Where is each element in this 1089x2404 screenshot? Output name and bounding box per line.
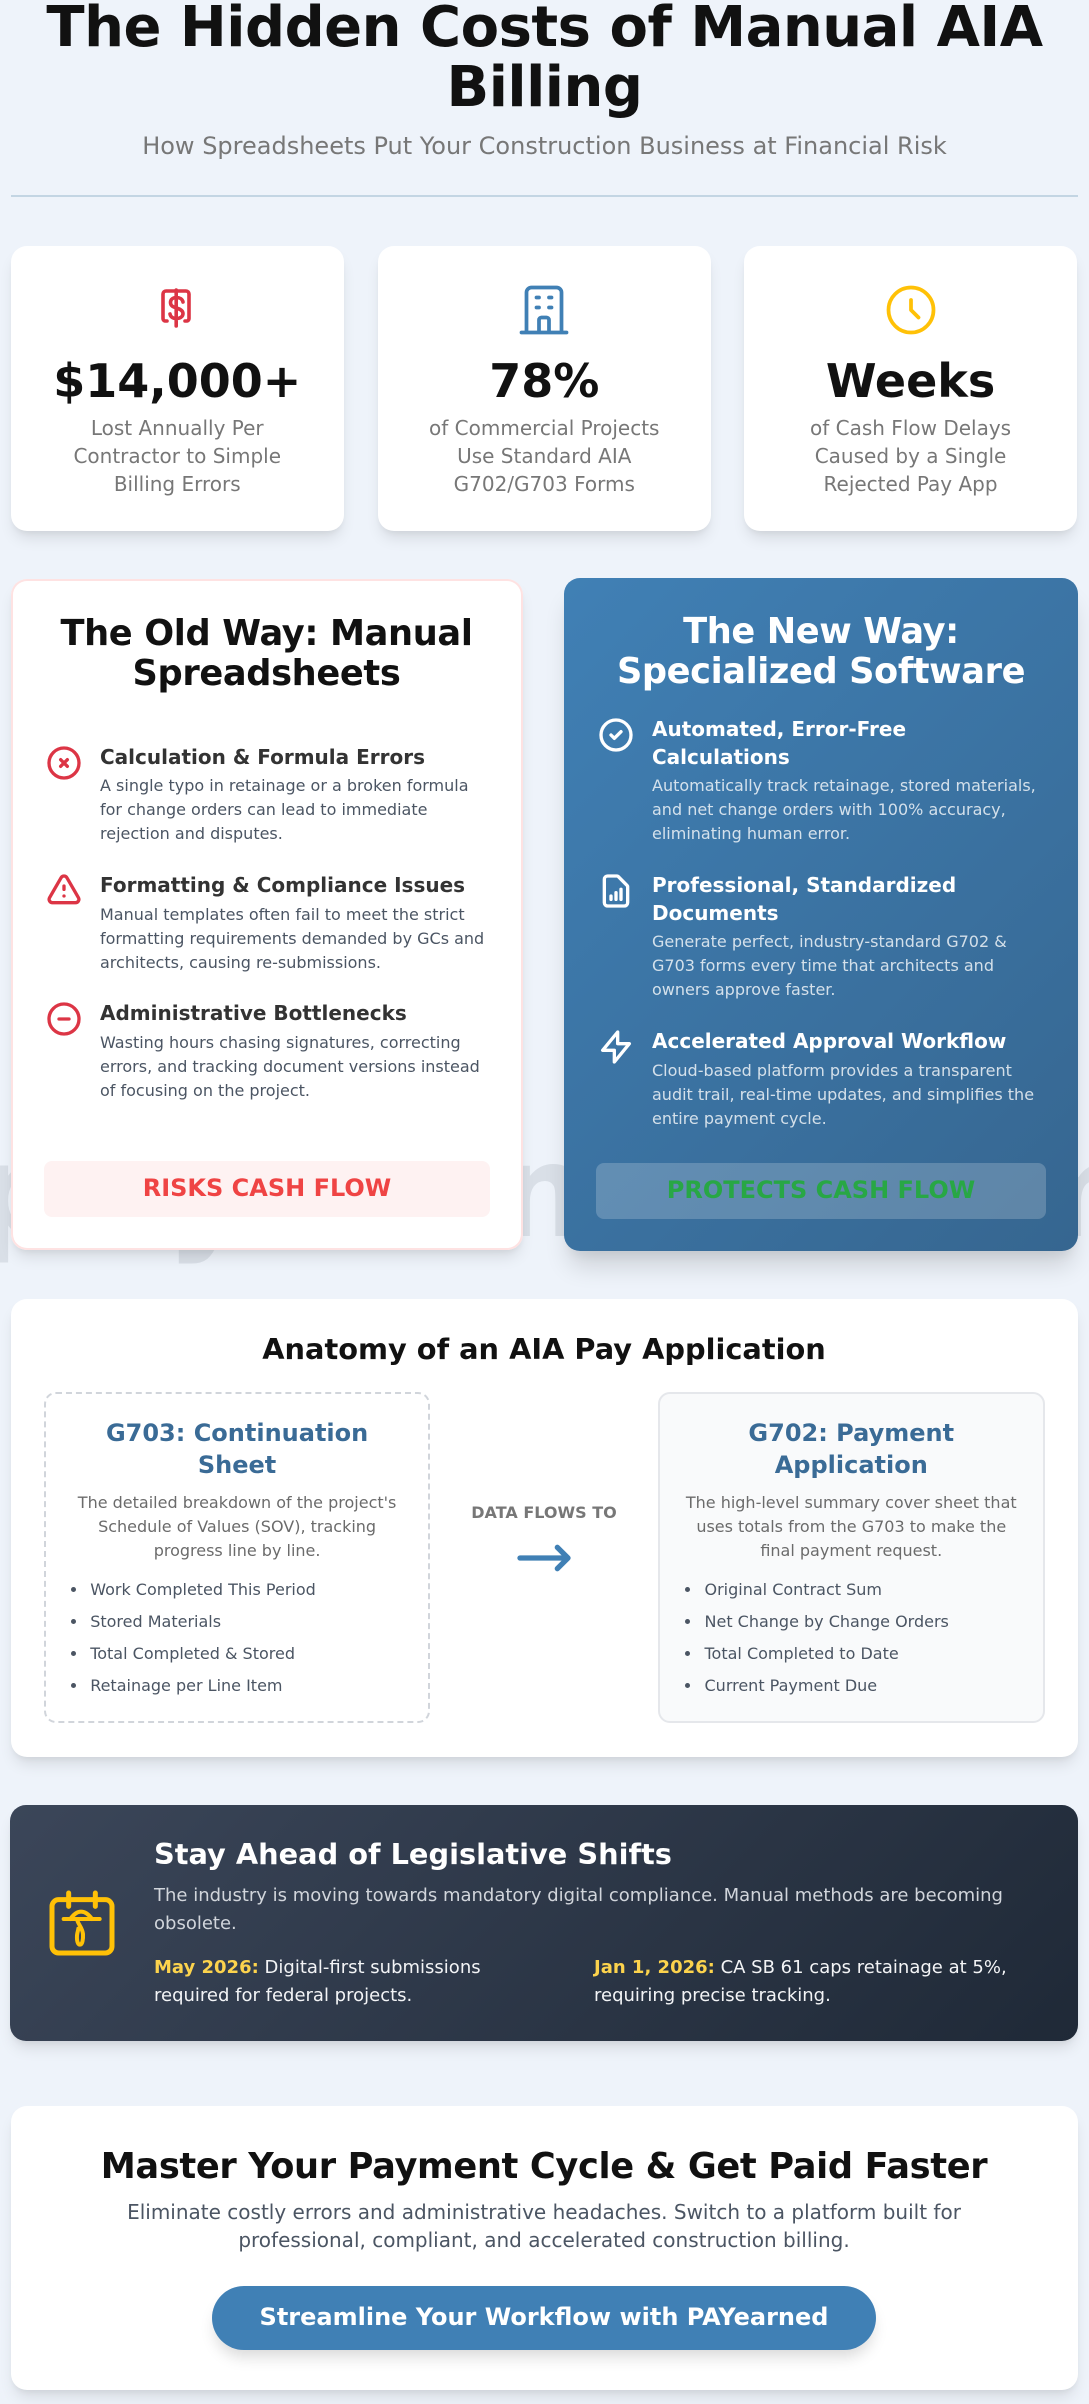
field list: Current Payment Due: [704, 1676, 877, 1695]
stat card: delays: [744, 246, 1077, 531]
paragraph: The industry is moving towards mandatory digital compliance. Manual methods are becoming: [154, 1885, 1003, 1906]
field list: Original Contract Sum: [704, 1580, 882, 1599]
item text: [652, 932, 1007, 999]
heading: [60, 612, 473, 694]
field list: Retainage per Line Item: [90, 1676, 282, 1695]
title: [46, 0, 1043, 120]
item text: for change orders can lead to immediate: [100, 800, 427, 819]
item text: [100, 776, 469, 843]
paragraph: obsolete.: [154, 1913, 237, 1934]
paragraph: Eliminate costly errors and administrative headaches. Switch to a platform built for: [127, 2200, 961, 2224]
field list: [685, 1580, 949, 1695]
item heading: Calculations: [652, 745, 790, 769]
item text: [100, 1032, 480, 1100]
icon: warning triangle: [47, 874, 81, 904]
icon: lightning bolt: [600, 1030, 632, 1064]
card heading: Sheet: [198, 1451, 276, 1479]
item text: Cloud-based platform provides a transparent: [652, 1060, 1012, 1080]
deadline: Jan 2026: [594, 1954, 1007, 2010]
card description: final payment request.: [760, 1541, 942, 1560]
panel: call to action: [10, 2106, 1078, 2390]
stat description: Use Standard AIA: [457, 444, 631, 468]
data flow arrow: [471, 1503, 617, 1572]
field list: Work Completed This Period: [90, 1580, 316, 1599]
item: formatting issues: [47, 873, 484, 972]
heading: Specialized Software: [617, 650, 1025, 692]
button: [212, 2286, 876, 2350]
stat card: annual loss: [10, 246, 344, 531]
item text: Generate perfect, industry-standard G702 &: [652, 932, 1007, 951]
button: Streamline Your Workflow with PAYearned: [260, 2303, 828, 2331]
item text: eliminating human error.: [652, 824, 850, 843]
item text: [652, 776, 1036, 843]
card description: progress line by line.: [154, 1541, 320, 1560]
item heading: Calculation & Formula Errors: [100, 745, 425, 769]
item heading: Accelerated Approval Workflow: [652, 1029, 1006, 1053]
card heading: [106, 1419, 368, 1479]
card description: [686, 1493, 1017, 1560]
deadline: Jan 2026: Jan 1, 2026: CA SB 61 caps retainage at 5%,: [594, 1956, 1007, 1978]
stat value: 78%: [489, 354, 599, 408]
field list: Stored Materials: [90, 1612, 221, 1631]
callout: risks cash flow: RISKS CASH FLOW: [143, 1174, 391, 1202]
stat description: Contractor to Simple: [73, 444, 281, 468]
stat description: G702/G703 Forms: [454, 472, 635, 496]
item text: A single typo in retainage or a broken formula: [100, 776, 469, 795]
deadline: Jan 2026: requiring precise tracking.: [594, 1985, 831, 2006]
callout: risks cash flow: [44, 1161, 490, 1217]
heading: Master Your Payment Cycle & Get Paid Faster: [101, 2146, 987, 2186]
item text: formatting requirements demanded by GCs and: [100, 928, 484, 948]
icon: dollar: [161, 288, 191, 328]
stat description: of Commercial Projects: [429, 416, 659, 440]
item text: errors, and tracking document versions instead: [100, 1056, 480, 1076]
card heading: Application: [775, 1451, 928, 1479]
item text: audit trail, real-time updates, and simplifies the: [652, 1084, 1034, 1104]
panel: the new way: [564, 578, 1078, 1251]
deadline: May 2026: required for federal projects.: [154, 1985, 412, 2006]
card description: The high-level summary cover sheet that: [686, 1493, 1017, 1512]
item text: Wasting hours chasing signatures, correcting: [100, 1032, 461, 1052]
item: calculation errors: [47, 745, 469, 843]
divider: [10, 195, 1078, 197]
item heading: Automated, Error-Free: [652, 717, 906, 741]
heading: Stay Ahead of Legislative Shifts: [154, 1837, 672, 1871]
title: Billing: [447, 55, 642, 120]
callout: protects cash flow: [596, 1163, 1046, 1219]
field list: Total Completed to Date: [704, 1644, 899, 1663]
stat description: of Cash Flow Delays: [810, 416, 1011, 440]
deadline: May 2026: [154, 1954, 481, 2010]
icon: minus circle: [47, 1002, 81, 1036]
stat description: [810, 416, 1011, 496]
field list: [71, 1580, 316, 1695]
item text: owners approve faster.: [652, 980, 835, 999]
card heading: G703: Continuation: [106, 1419, 368, 1447]
icon: document report: [602, 874, 630, 908]
paragraph: [154, 1885, 1003, 1934]
deadline: May 2026: May 2026: Digital-first submissions: [154, 1956, 481, 1978]
panel: legislative shifts: [10, 1805, 1078, 2041]
panel: anatomy of a pay application: [10, 1299, 1078, 1757]
item text: [652, 1060, 1034, 1128]
stat card: adoption: [378, 246, 711, 531]
card heading: [748, 1419, 954, 1479]
icon: check circle: [599, 718, 633, 752]
item: standardized documents: [602, 873, 1007, 999]
item: administrative bottlenecks: [47, 1001, 480, 1100]
stat value: Weeks: [826, 354, 995, 408]
icon: clock: [886, 286, 936, 334]
stat description: [73, 416, 281, 496]
card: G702: [658, 1392, 1044, 1723]
item text: G703 forms every time that architects and: [652, 956, 994, 975]
item text: and net change orders with 100% accuracy,: [652, 800, 1006, 819]
paragraph: [10, 2198, 1078, 2254]
item text: entire payment cycle.: [652, 1108, 827, 1128]
card: G703: [44, 1392, 430, 1723]
card heading: G702: Payment: [748, 1419, 954, 1447]
item heading: Documents: [652, 901, 779, 925]
heading: Anatomy of an AIA Pay Application: [262, 1332, 826, 1366]
card description: [78, 1493, 396, 1560]
item heading: [652, 873, 956, 925]
item heading: Administrative Bottlenecks: [100, 1001, 407, 1025]
stat value: $14,000+: [53, 354, 301, 408]
subtitle: How Spreadsheets Put Your Construction Business at Financial Risk: [142, 132, 947, 160]
heading: The New Way:: [683, 611, 959, 652]
item text: Automatically track retainage, stored materials,: [652, 776, 1036, 795]
icon: building: [520, 286, 568, 334]
item text: rejection and disputes.: [100, 824, 283, 843]
callout: protects cash flow: PROTECTS CASH FLOW: [667, 1176, 975, 1204]
item heading: Formatting & Compliance Issues: [100, 873, 465, 897]
field list: Net Change by Change Orders: [704, 1612, 949, 1631]
card description: The detailed breakdown of the project's: [78, 1493, 396, 1512]
item heading: [652, 717, 906, 769]
stat description: Rejected Pay App: [824, 472, 998, 496]
icon: x circle: [47, 746, 81, 780]
icon: calendar: [50, 1890, 114, 1956]
stat description: Billing Errors: [114, 472, 241, 496]
item text: Manual templates often fail to meet the strict: [100, 904, 465, 924]
card description: uses totals from the G703 to make the: [696, 1517, 1006, 1536]
item text: architects, causing re-submissions.: [100, 952, 381, 972]
heading: [617, 611, 1025, 692]
item: approval workflow: [600, 1029, 1034, 1128]
item text: of focusing on the project.: [100, 1080, 310, 1100]
icon: arrow: [517, 1544, 571, 1572]
stat description: Lost Annually Per: [91, 416, 264, 440]
stat description: Caused by a Single: [815, 444, 1006, 468]
item text: [100, 904, 484, 972]
heading: The Old Way: Manual: [60, 612, 473, 654]
heading: Spreadsheets: [132, 653, 400, 694]
field list: Total Completed & Stored: [90, 1644, 295, 1663]
card description: Schedule of Values (SOV), tracking: [98, 1517, 376, 1536]
item: automated calculations: [599, 717, 1036, 843]
paragraph: professional, compliant, and accelerated construction billing.: [238, 2228, 850, 2252]
item heading: Professional, Standardized: [652, 873, 956, 897]
panel: the old way: [10, 579, 522, 1250]
arrow label: DATA FLOWS TO: [471, 1503, 617, 1522]
stat description: [429, 416, 659, 496]
